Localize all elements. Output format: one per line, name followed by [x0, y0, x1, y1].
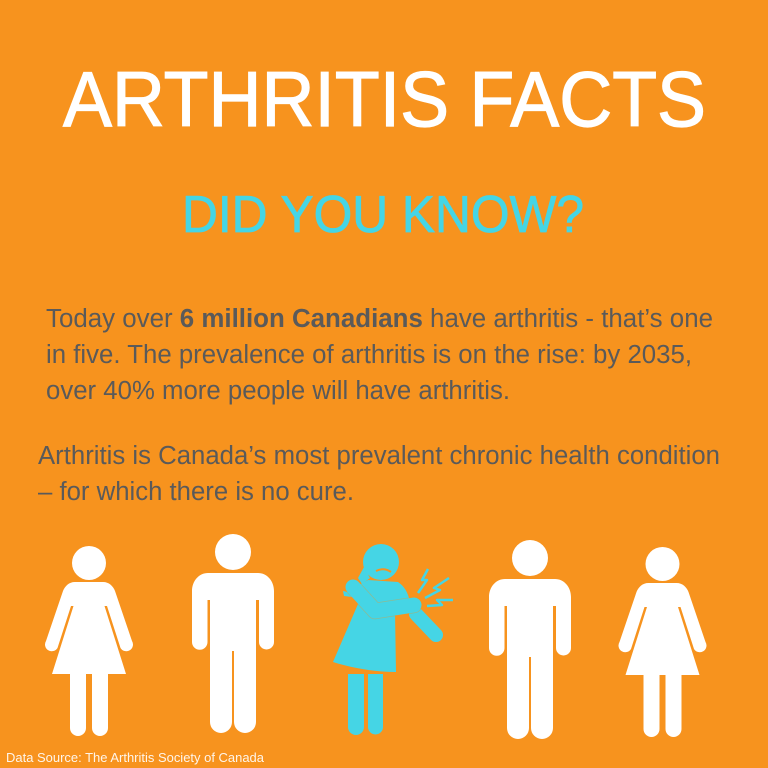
text block: chronic condition — [38, 442, 720, 506]
icon: man right — [489, 540, 571, 739]
data source note: Data Source: The Arthritis Society of Canada — [6, 751, 264, 765]
text block: chronic condition: Arthritis is Canada’s most prevalent chronic health condition — [38, 442, 720, 470]
icon: woman right — [619, 547, 706, 737]
text block: chronic condition: – for which there is no cure. — [38, 478, 354, 506]
text block: prevalence: Today over 6 million Canadians have arthritis - that’s one — [46, 305, 713, 333]
icon: woman left — [45, 546, 133, 736]
text block: prevalence — [46, 305, 713, 405]
text block: prevalence: in five. The prevalence of arthritis is on the rise: by 2035, — [46, 341, 692, 369]
icon: woman in pain — [333, 544, 453, 735]
icon: man left — [192, 534, 274, 733]
title: ARTHRITIS FACTS — [63, 55, 706, 143]
text block: prevalence: over 40% more people will have arthritis. — [46, 377, 510, 405]
subtitle: DID YOU KNOW? — [182, 186, 584, 244]
